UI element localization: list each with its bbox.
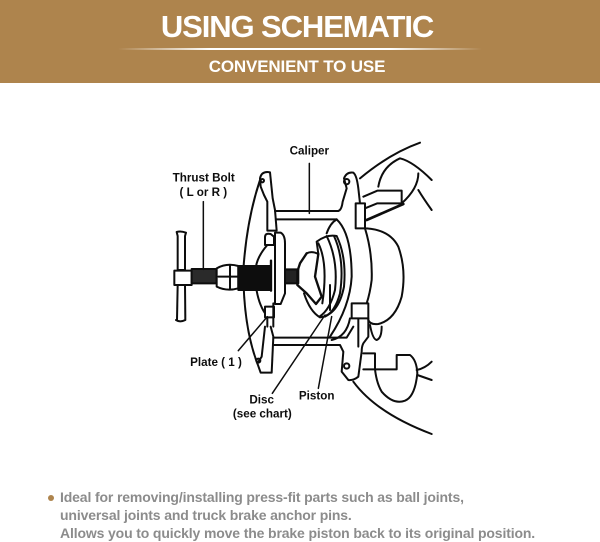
upper arm and wheel outline [360,143,432,220]
diagram labels: ( L or R ) [179,186,227,199]
subtitle: CONVENIENT TO USE [209,57,385,76]
description text: Allows you to quickly move the brake piston back to its original position. [60,525,535,541]
description text [60,489,535,541]
schematic diagram [172,142,433,435]
diagram labels: Disc [249,394,274,407]
threaded thrust bolt [192,261,298,291]
bullet [48,495,54,501]
T-handle [174,231,192,321]
title: USING SCHEMATIC [161,9,433,44]
diagram labels [173,145,334,421]
header banner [0,0,600,83]
description text block [48,489,535,541]
leader lines [203,163,332,393]
diagram labels: Thrust Bolt [173,172,235,185]
diagram labels: (see chart) [233,408,292,421]
diagram labels: Piston [299,389,334,402]
diagram labels: Caliper [290,145,330,158]
thrust plate [256,233,285,327]
caliper body [243,172,432,434]
description text: Ideal for removing/installing press-fit parts such as ball joints, [60,489,464,505]
description text: universal joints and truck brake anchor pins. [60,507,352,523]
divider line [118,48,482,50]
diagram labels: Plate ( 1 ) [190,356,242,369]
piston and disc [297,236,345,317]
